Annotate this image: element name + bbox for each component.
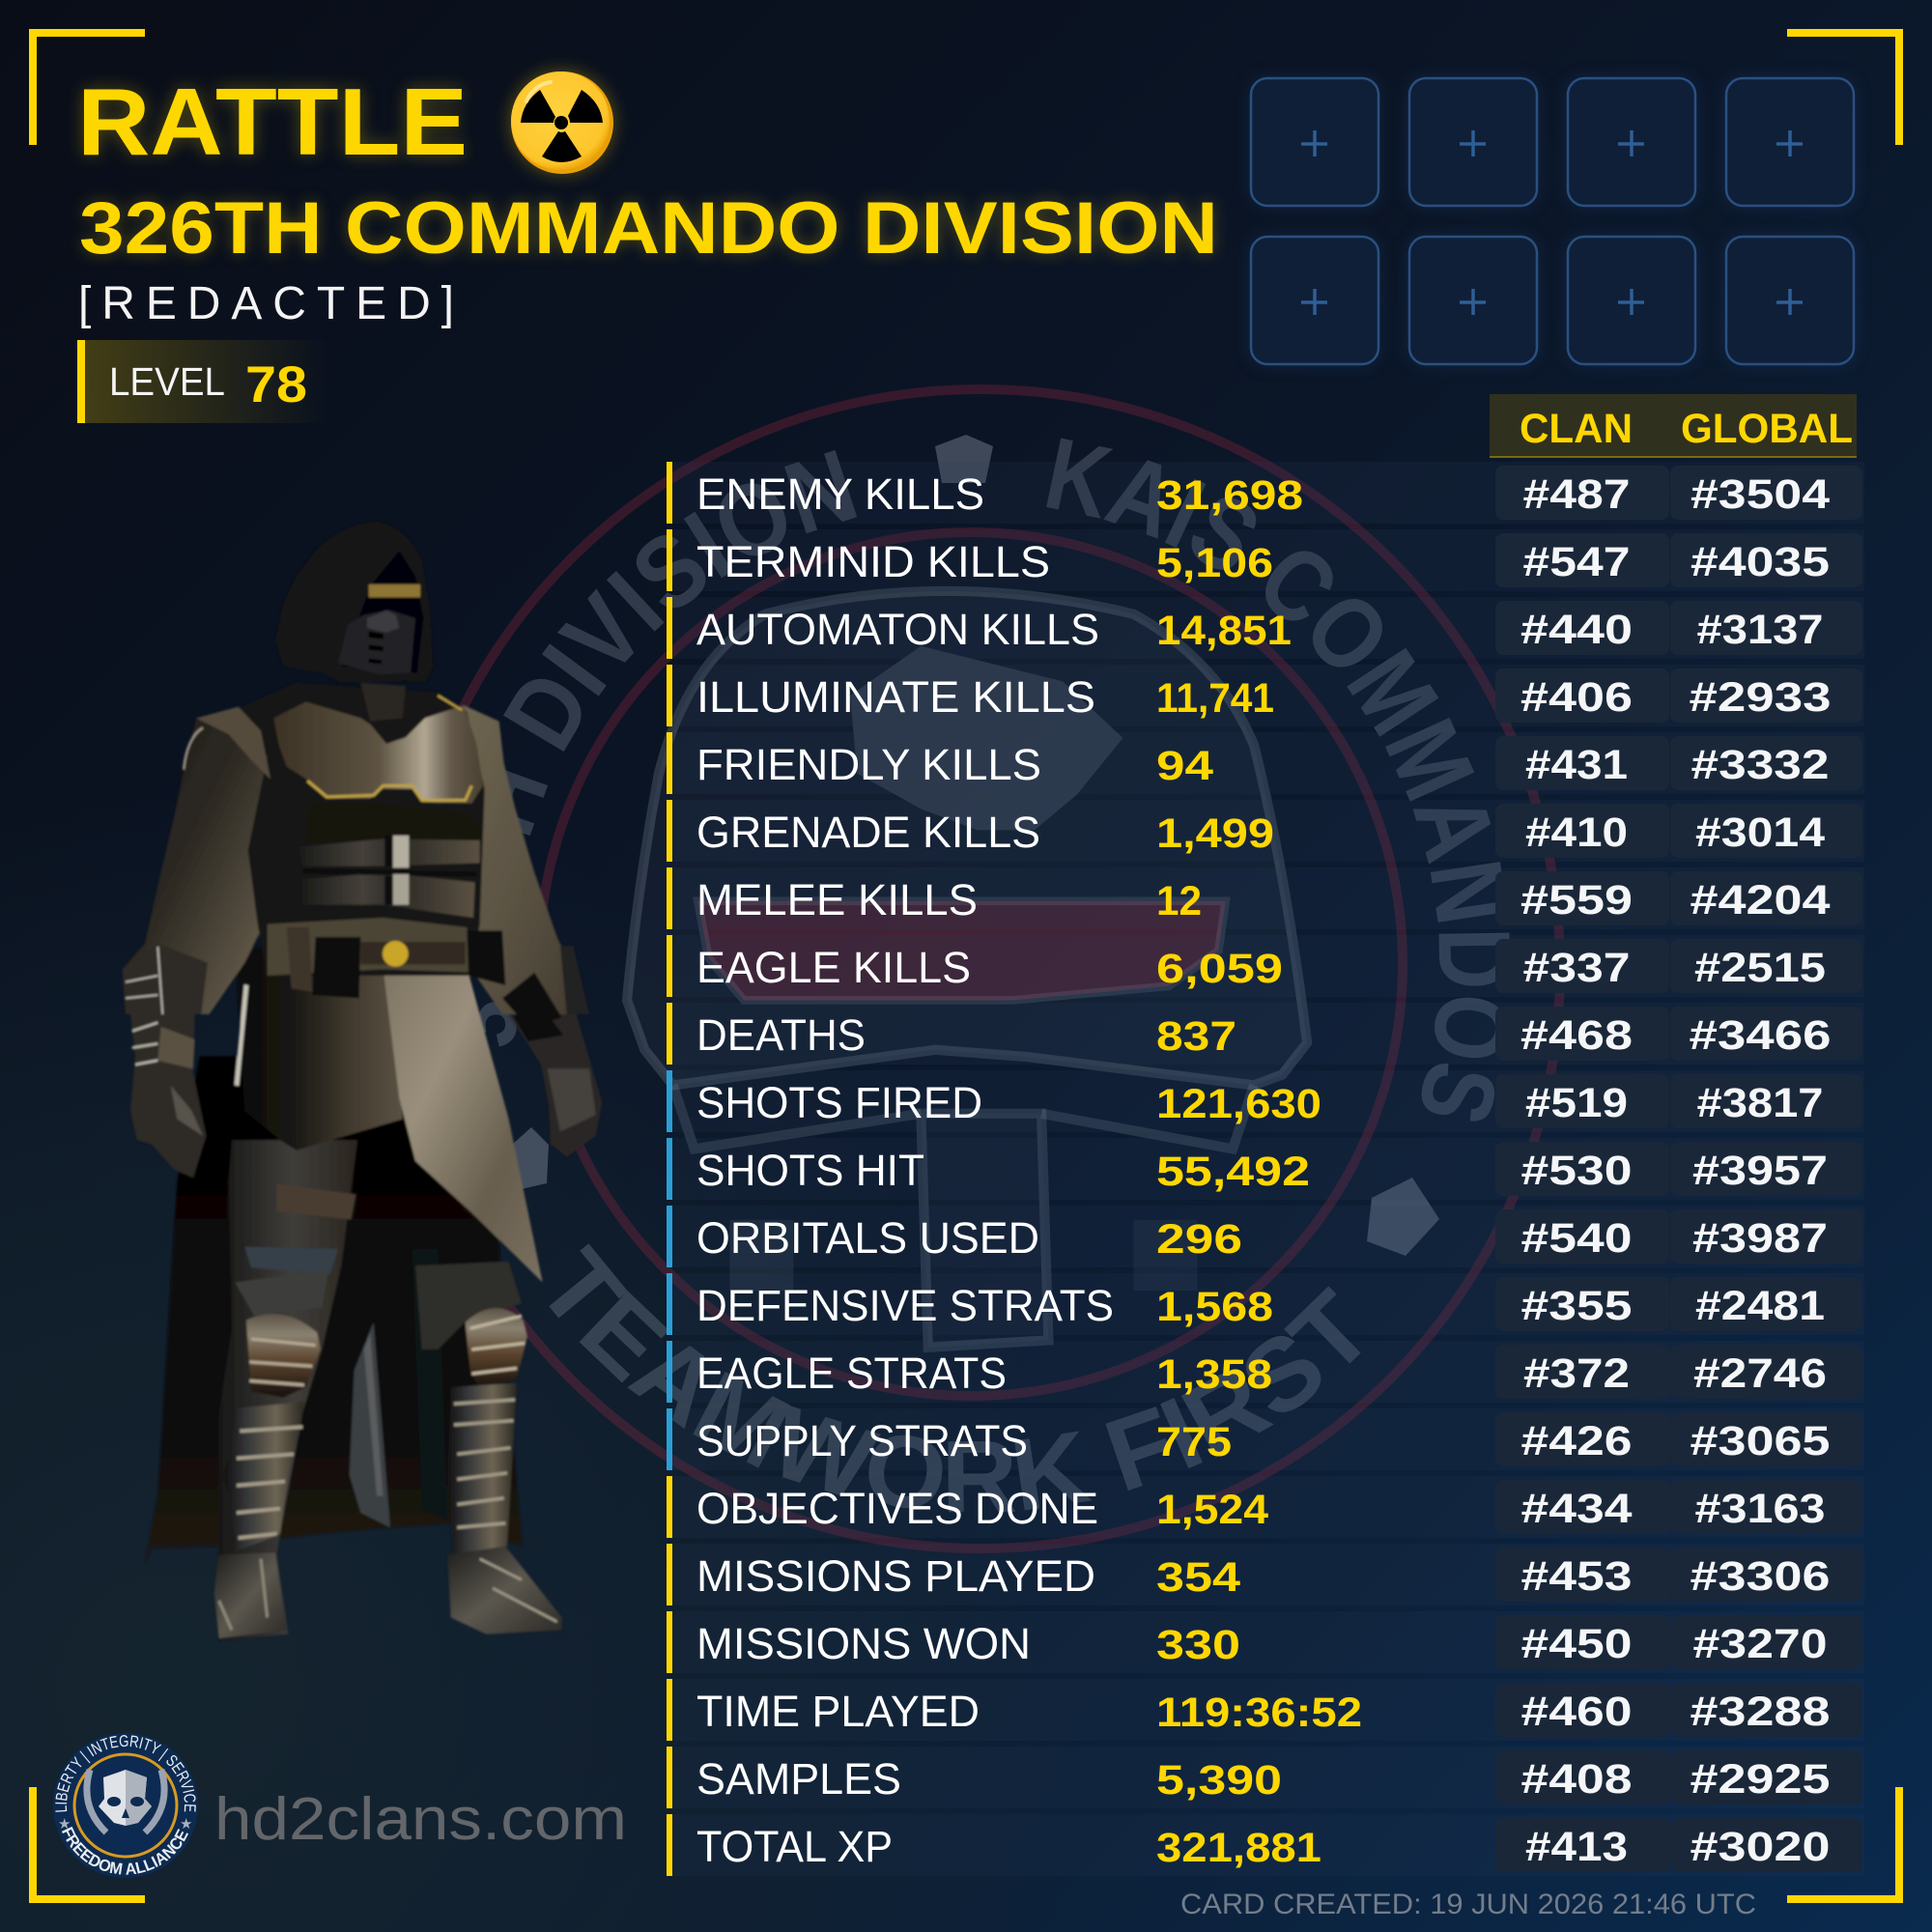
row: missions played: #3306 bbox=[1690, 1553, 1830, 1600]
row: automaton kills: #3137 bbox=[1696, 607, 1824, 653]
row: shots hit: #3957 bbox=[1692, 1148, 1828, 1194]
row: time played: 119:36:52 bbox=[1156, 1690, 1362, 1736]
row: terminid kills bbox=[667, 529, 1864, 591]
row: defensive strats: #355 bbox=[1520, 1283, 1633, 1329]
footer: card created date: CARD CREATED: 19 JUN 2026 21:46 UTC bbox=[1180, 1889, 1756, 1920]
row: time played: #3288 bbox=[1690, 1689, 1830, 1735]
corner bracket: bottom right bbox=[1787, 1787, 1899, 1899]
row: supply strats: 775 bbox=[1156, 1419, 1232, 1465]
row: missions played: #453 bbox=[1520, 1553, 1633, 1600]
row: orbitals used: ORBITALS USED bbox=[696, 1213, 1039, 1263]
heading: division name: 326TH COMMANDO DIVISION bbox=[79, 187, 1218, 270]
row: missions won bbox=[667, 1611, 1864, 1673]
row: eagle kills: EAGLE KILLS bbox=[696, 943, 971, 992]
row: friendly kills: FRIENDLY KILLS bbox=[696, 740, 1041, 789]
row: melee kills bbox=[667, 867, 1864, 929]
row: samples: SAMPLES bbox=[696, 1754, 901, 1804]
row: orbitals used: 296 bbox=[1156, 1216, 1242, 1263]
row: grenade kills: #410 bbox=[1525, 810, 1628, 856]
row: objectives done: 1,524 bbox=[1156, 1487, 1268, 1533]
row: shots hit: 55,492 bbox=[1156, 1149, 1310, 1195]
text: redacted tag: [REDACTED] bbox=[78, 278, 454, 329]
cape bbox=[145, 1056, 523, 1564]
row: supply strats: #426 bbox=[1520, 1418, 1633, 1464]
badge: freedom alliance: FREEDOM ALLIANCE bbox=[62, 1826, 188, 1875]
row: missions played bbox=[667, 1544, 1864, 1605]
row: melee kills: MELEE KILLS bbox=[696, 875, 978, 924]
row: supply strats: SUPPLY STRATS bbox=[696, 1416, 1028, 1465]
badge: freedom alliance: ★ bbox=[58, 1816, 71, 1833]
row: total xp bbox=[667, 1814, 1864, 1876]
row: shots hit: SHOTS HIT bbox=[696, 1146, 924, 1195]
row: eagle kills: #337 bbox=[1522, 945, 1631, 991]
row: objectives done: #3163 bbox=[1694, 1486, 1826, 1532]
row: grenade kills: 1,499 bbox=[1156, 810, 1274, 857]
corner bracket: bottom left bbox=[33, 1787, 145, 1899]
table header: clan and global bbox=[1490, 394, 1857, 458]
row: eagle strats: #372 bbox=[1523, 1350, 1630, 1397]
row: shots fired: #519 bbox=[1525, 1080, 1628, 1126]
row: time played bbox=[667, 1679, 1864, 1741]
row: automaton kills bbox=[667, 597, 1864, 659]
row: defensive strats bbox=[667, 1273, 1864, 1335]
row: objectives done bbox=[667, 1476, 1864, 1538]
row: enemy kills: 31,698 bbox=[1156, 472, 1303, 519]
row: samples: #408 bbox=[1520, 1756, 1633, 1803]
row: deaths: DEATHS bbox=[696, 1010, 866, 1060]
row: deaths bbox=[667, 1003, 1864, 1065]
watermark emblem: TEAMWORK FIRST bbox=[549, 1244, 1360, 1513]
level badge: 78 bbox=[245, 356, 307, 413]
row: orbitals used bbox=[667, 1206, 1864, 1267]
row: shots fired: 121,630 bbox=[1156, 1081, 1321, 1127]
badge: freedom alliance: LIBERTY | INTEGRITY | SERVICE bbox=[55, 1735, 196, 1812]
watermark emblem: 326TH DIVISION bbox=[479, 450, 857, 1047]
row: grenade kills bbox=[667, 800, 1864, 862]
row: terminid kills: TERMINID KILLS bbox=[696, 537, 1050, 586]
row: total xp: #413 bbox=[1525, 1824, 1628, 1870]
row: illuminate kills: #406 bbox=[1520, 674, 1633, 721]
row: eagle strats bbox=[667, 1341, 1864, 1403]
row: time played: TIME PLAYED bbox=[696, 1687, 980, 1736]
row: supply strats bbox=[667, 1408, 1864, 1470]
row: total xp: 321,881 bbox=[1156, 1825, 1321, 1871]
row: shots hit bbox=[667, 1138, 1864, 1200]
character figure bbox=[123, 522, 602, 1640]
gauntlets and hands bbox=[130, 1014, 602, 1178]
hood and helmet bbox=[275, 522, 433, 683]
row: missions won: #450 bbox=[1520, 1621, 1633, 1667]
row: melee kills: #4204 bbox=[1690, 877, 1831, 923]
row: eagle kills: 6,059 bbox=[1156, 946, 1283, 992]
row: samples: #2925 bbox=[1690, 1756, 1830, 1803]
row: defensive strats: 1,568 bbox=[1156, 1284, 1273, 1330]
row: missions won: #3270 bbox=[1692, 1621, 1828, 1667]
stats table bbox=[667, 462, 1864, 1876]
row: illuminate kills bbox=[667, 665, 1864, 726]
legs bbox=[214, 1140, 562, 1640]
row: deaths: #468 bbox=[1520, 1012, 1633, 1059]
site url: hd2clans.com bbox=[214, 1786, 627, 1853]
row: melee kills: #559 bbox=[1520, 877, 1633, 923]
title: player name: RATTLE bbox=[77, 69, 468, 175]
row: deaths: 837 bbox=[1156, 1013, 1236, 1060]
badge: freedom alliance: ★ bbox=[180, 1816, 192, 1833]
row: supply strats: #3065 bbox=[1690, 1418, 1830, 1464]
row: illuminate kills: #2933 bbox=[1689, 674, 1832, 721]
row: time played: #460 bbox=[1520, 1689, 1633, 1735]
row: automaton kills: 14,851 bbox=[1156, 608, 1292, 654]
level badge: LEVEL bbox=[109, 359, 225, 404]
row: missions played: MISSIONS PLAYED bbox=[696, 1551, 1095, 1601]
row: defensive strats: #2481 bbox=[1695, 1283, 1825, 1329]
row: automaton kills: #440 bbox=[1520, 607, 1633, 653]
row: objectives done: #434 bbox=[1520, 1486, 1633, 1532]
row: eagle strats: 1,358 bbox=[1156, 1351, 1272, 1398]
row: missions won: 330 bbox=[1156, 1622, 1240, 1668]
row: total xp: #3020 bbox=[1690, 1824, 1830, 1870]
row: illuminate kills: ILLUMINATE KILLS bbox=[696, 672, 1095, 722]
row: friendly kills: #431 bbox=[1525, 742, 1628, 788]
row: eagle strats: #2746 bbox=[1693, 1350, 1827, 1397]
badge: freedom alliance bbox=[53, 1733, 198, 1878]
row: samples: 5,390 bbox=[1156, 1757, 1282, 1804]
corner bracket: top right bbox=[1787, 33, 1899, 145]
panel: stratagem slots bbox=[1251, 78, 1854, 364]
row: eagle kills bbox=[667, 935, 1864, 997]
row: enemy kills: ENEMY KILLS bbox=[696, 469, 984, 519]
arms bbox=[123, 705, 589, 1014]
row: friendly kills: #3332 bbox=[1690, 742, 1830, 788]
row: defensive strats: DEFENSIVE STRATS bbox=[696, 1281, 1114, 1330]
watermark emblem bbox=[458, 384, 1565, 1553]
torso bbox=[196, 683, 562, 1027]
row: friendly kills bbox=[667, 732, 1864, 794]
row: terminid kills: #4035 bbox=[1690, 539, 1830, 585]
row: missions won: MISSIONS WON bbox=[696, 1619, 1031, 1668]
row: shots fired: #3817 bbox=[1696, 1080, 1824, 1126]
row: enemy kills: #487 bbox=[1522, 471, 1631, 518]
row: illuminate kills: 11,741 bbox=[1156, 675, 1274, 722]
row: enemy kills: #3504 bbox=[1690, 471, 1830, 518]
row: orbitals used: #3987 bbox=[1692, 1215, 1828, 1262]
row: eagle kills: #2515 bbox=[1694, 945, 1826, 991]
corner bracket: top left bbox=[33, 33, 145, 145]
table header: clan and global: GLOBAL bbox=[1681, 406, 1853, 452]
row: terminid kills: #547 bbox=[1522, 539, 1631, 585]
row: total xp: TOTAL XP bbox=[696, 1822, 893, 1871]
row: deaths: #3466 bbox=[1689, 1012, 1832, 1059]
row: samples bbox=[667, 1747, 1864, 1808]
row: objectives done: OBJECTIVES DONE bbox=[696, 1484, 1098, 1533]
coat skirt bbox=[235, 948, 543, 1283]
row: grenade kills: GRENADE KILLS bbox=[696, 808, 1040, 857]
row: friendly kills: 94 bbox=[1156, 743, 1213, 789]
row: missions played: 354 bbox=[1156, 1554, 1240, 1601]
level badge bbox=[77, 340, 328, 423]
row: orbitals used: #540 bbox=[1520, 1215, 1633, 1262]
row: melee kills: 12 bbox=[1156, 878, 1202, 924]
row: automaton kills: AUTOMATON KILLS bbox=[696, 605, 1099, 654]
icon: radiation badge bbox=[511, 71, 613, 174]
watermark emblem: KAIS COMMANDOS bbox=[1046, 439, 1509, 1121]
row: terminid kills: 5,106 bbox=[1156, 540, 1273, 586]
row: shots hit: #530 bbox=[1520, 1148, 1633, 1194]
row: grenade kills: #3014 bbox=[1695, 810, 1825, 856]
table header: clan and global: CLAN bbox=[1520, 406, 1633, 452]
row: eagle strats: EAGLE STRATS bbox=[696, 1349, 1007, 1398]
row: shots fired bbox=[667, 1070, 1864, 1132]
row: shots fired: SHOTS FIRED bbox=[696, 1078, 982, 1127]
row: enemy kills bbox=[667, 462, 1864, 524]
